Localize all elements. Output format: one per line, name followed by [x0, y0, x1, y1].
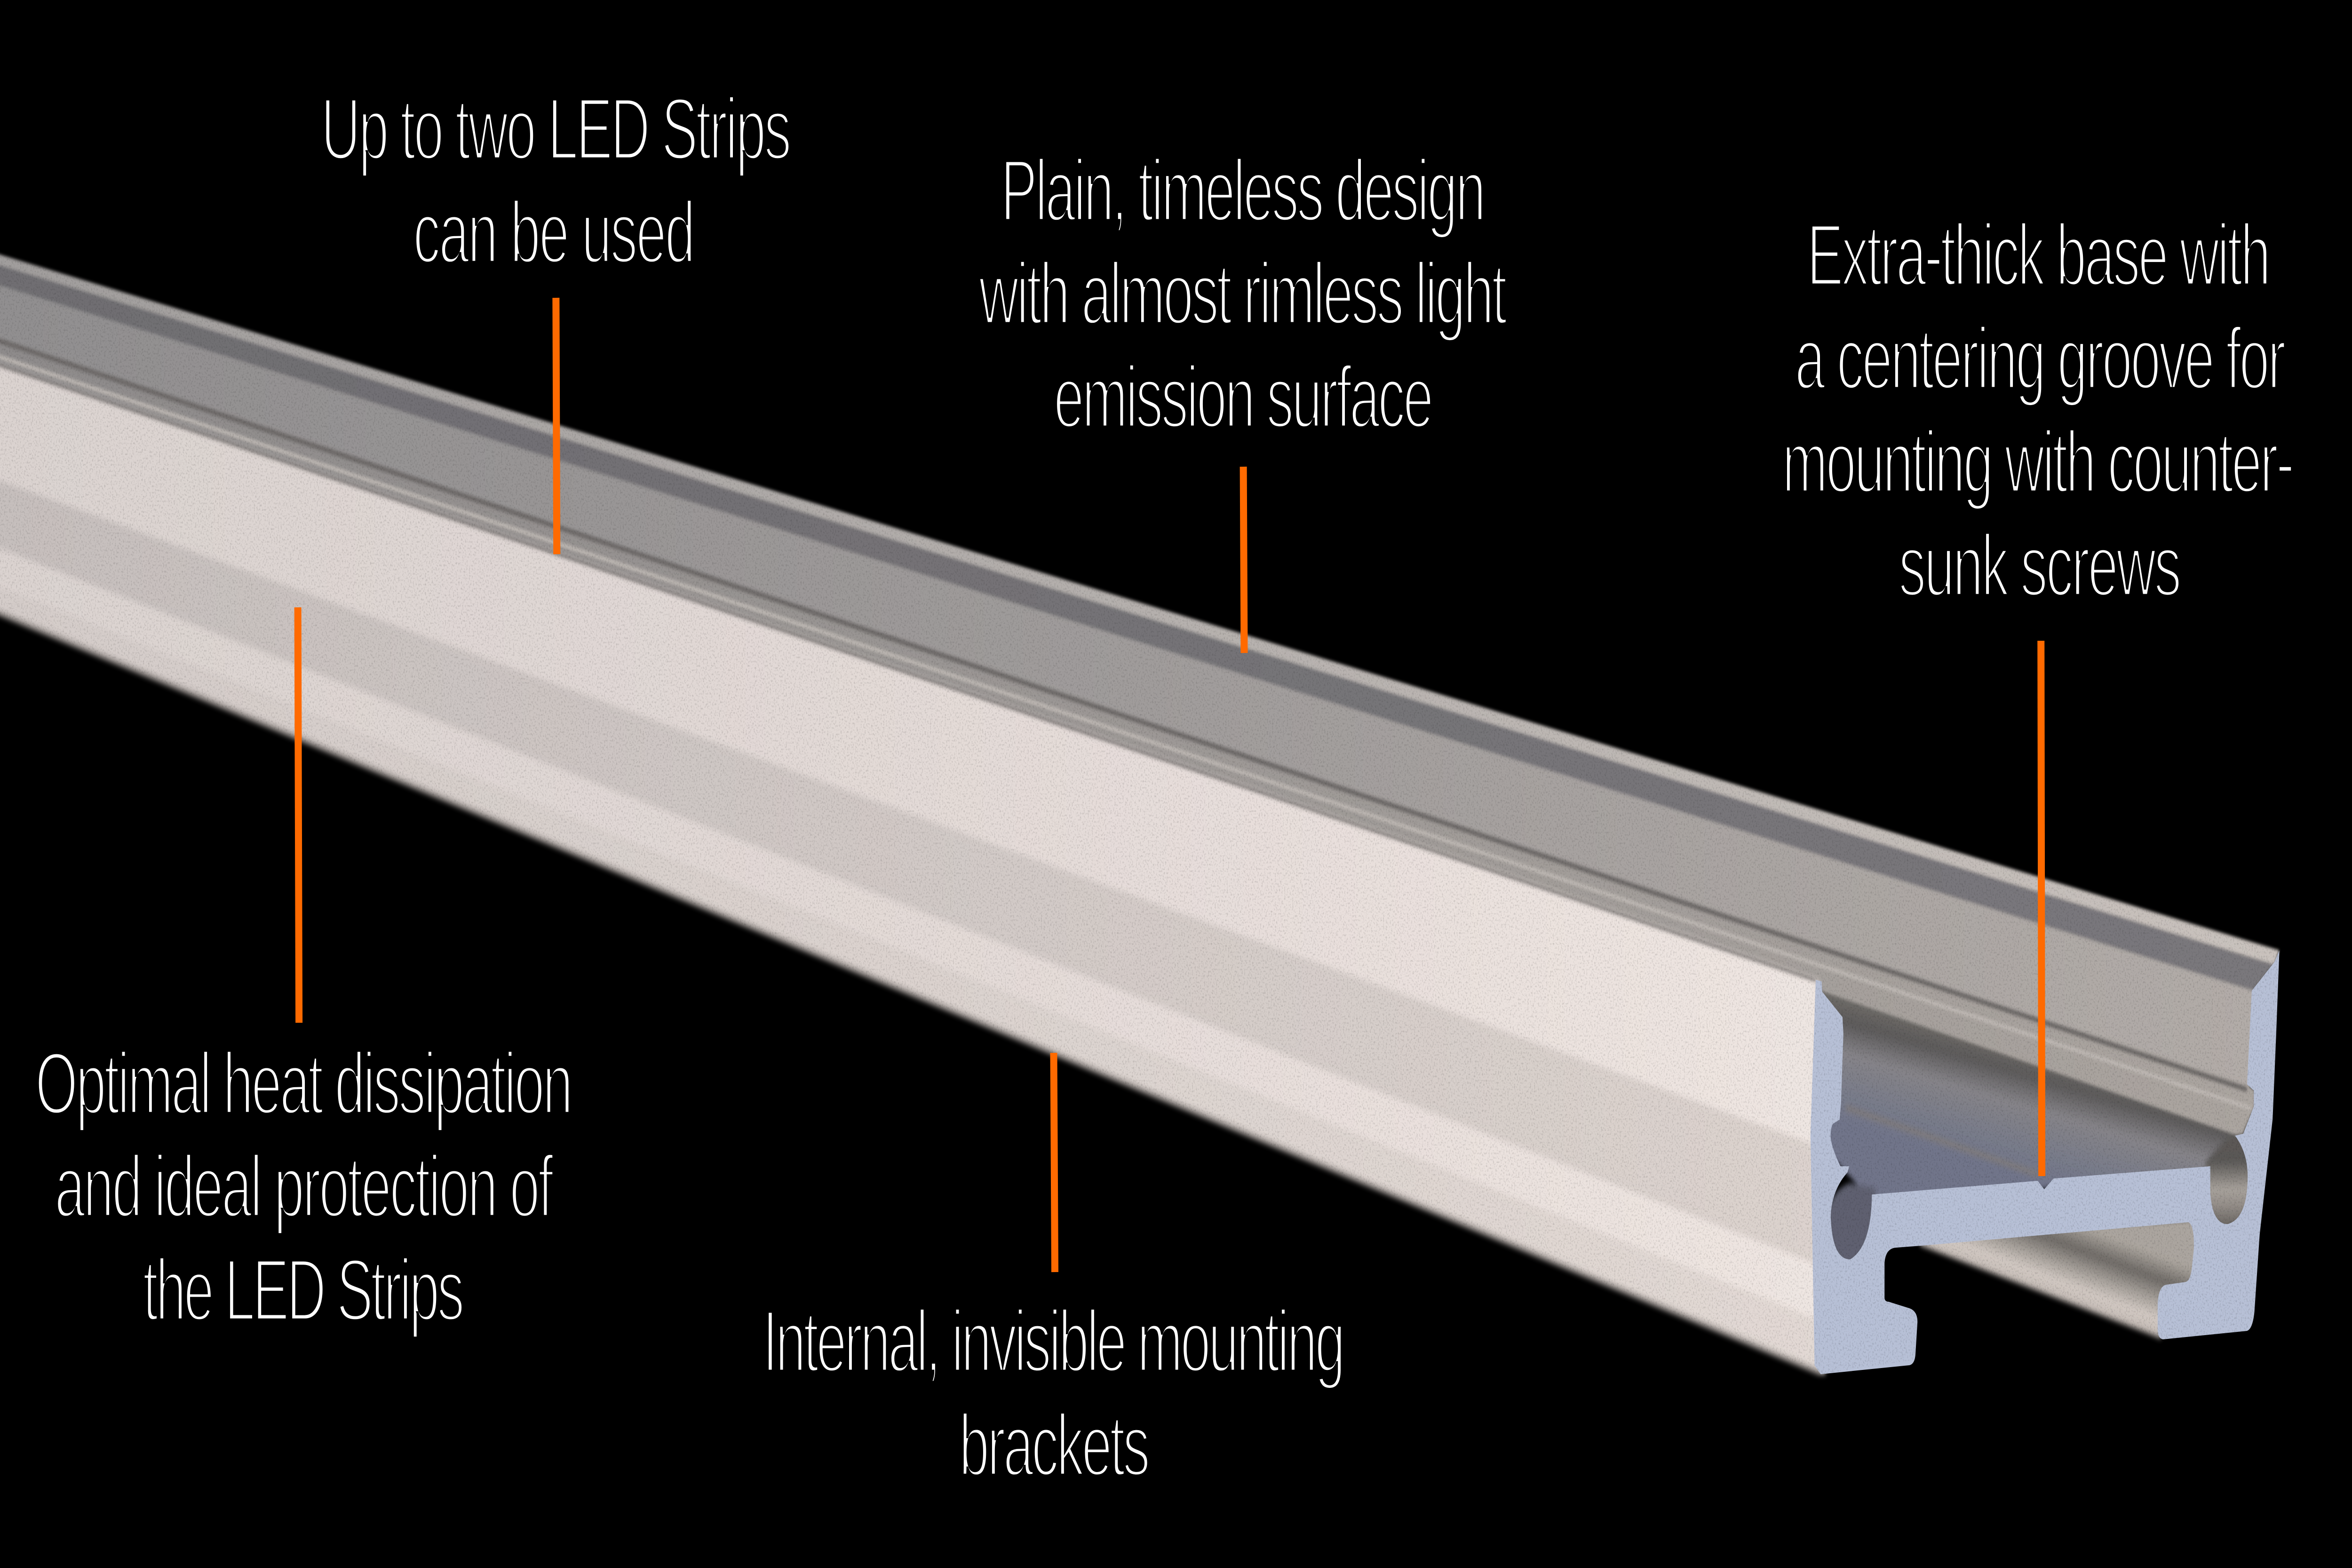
callout text: plain design: with almost rimless light: [979, 245, 1507, 342]
callout text: heat dissipation: and ideal protection of: [55, 1138, 554, 1235]
interior faint seam: [1846, 1107, 2038, 1174]
callout text: mounting brackets: [763, 1292, 1345, 1494]
callout line: heat dissipation: [298, 607, 299, 1023]
callout line: extra-thick base: [2041, 641, 2042, 1176]
callout text: extra-thick base: mounting with counter-: [1782, 413, 2295, 511]
callout text: mounting brackets: brackets: [959, 1396, 1150, 1494]
callout line: plain design: [1243, 467, 1244, 653]
surface grain: [0, 255, 2280, 1374]
callout text: heat dissipation: Optimal heat dissipation: [35, 1035, 573, 1132]
aluminium LED profile extrusion: [0, 246, 2280, 1374]
underside surface of the channel: [1917, 1218, 2199, 1339]
inner shadow band: [0, 256, 2274, 991]
soft lower edge: [0, 601, 1820, 1372]
callout text: plain design: emission surface: [1054, 348, 1434, 446]
interior of the channel: [1814, 976, 2251, 1339]
outer side shaded band: [0, 470, 1819, 1265]
callout line: mounting brackets: [1054, 1053, 1055, 1272]
outer side face: [0, 355, 1826, 1374]
interior wall of the channel: [1814, 976, 2250, 1202]
outer side light band: [0, 536, 1819, 1321]
inner faces above the opening: [0, 246, 2280, 1135]
ridge highlight line: [0, 347, 2251, 1108]
right pocket: [2205, 1127, 2251, 1229]
callout text: plain design: Plain, timeless design: [1001, 142, 1486, 239]
callout text: two LED strips: [321, 80, 791, 281]
inner ridge band: [0, 331, 2255, 1135]
callout text: heat dissipation: the LED Strips: [143, 1241, 464, 1339]
left pocket: [1827, 1183, 1876, 1266]
outer side top band: [0, 355, 1819, 1146]
callout text: extra-thick base: a centering groove for: [1795, 310, 2286, 407]
inner lip highlight: [0, 246, 2280, 964]
callout text: extra-thick base: sunk screws: [1899, 517, 2182, 614]
callout text: heat dissipation: [35, 1035, 573, 1339]
callout line: two LED strips: [556, 298, 557, 554]
callout text: two LED strips: can be used: [413, 183, 695, 281]
callout text: mounting brackets: Internal, invisible mounting: [763, 1292, 1345, 1390]
blue cut cross-section: [1811, 950, 2280, 1374]
ridge groove line: [0, 331, 2247, 1090]
inner wall band: [0, 276, 2254, 1091]
outer side foot band: [0, 576, 1826, 1374]
callout text: extra-thick base: Extra-thick base with: [1807, 206, 2271, 304]
callout text: plain design: [979, 142, 1507, 446]
callout text: two LED strips: Up to two LED Strips: [321, 80, 791, 178]
callout text: extra-thick base: [1782, 206, 2295, 614]
